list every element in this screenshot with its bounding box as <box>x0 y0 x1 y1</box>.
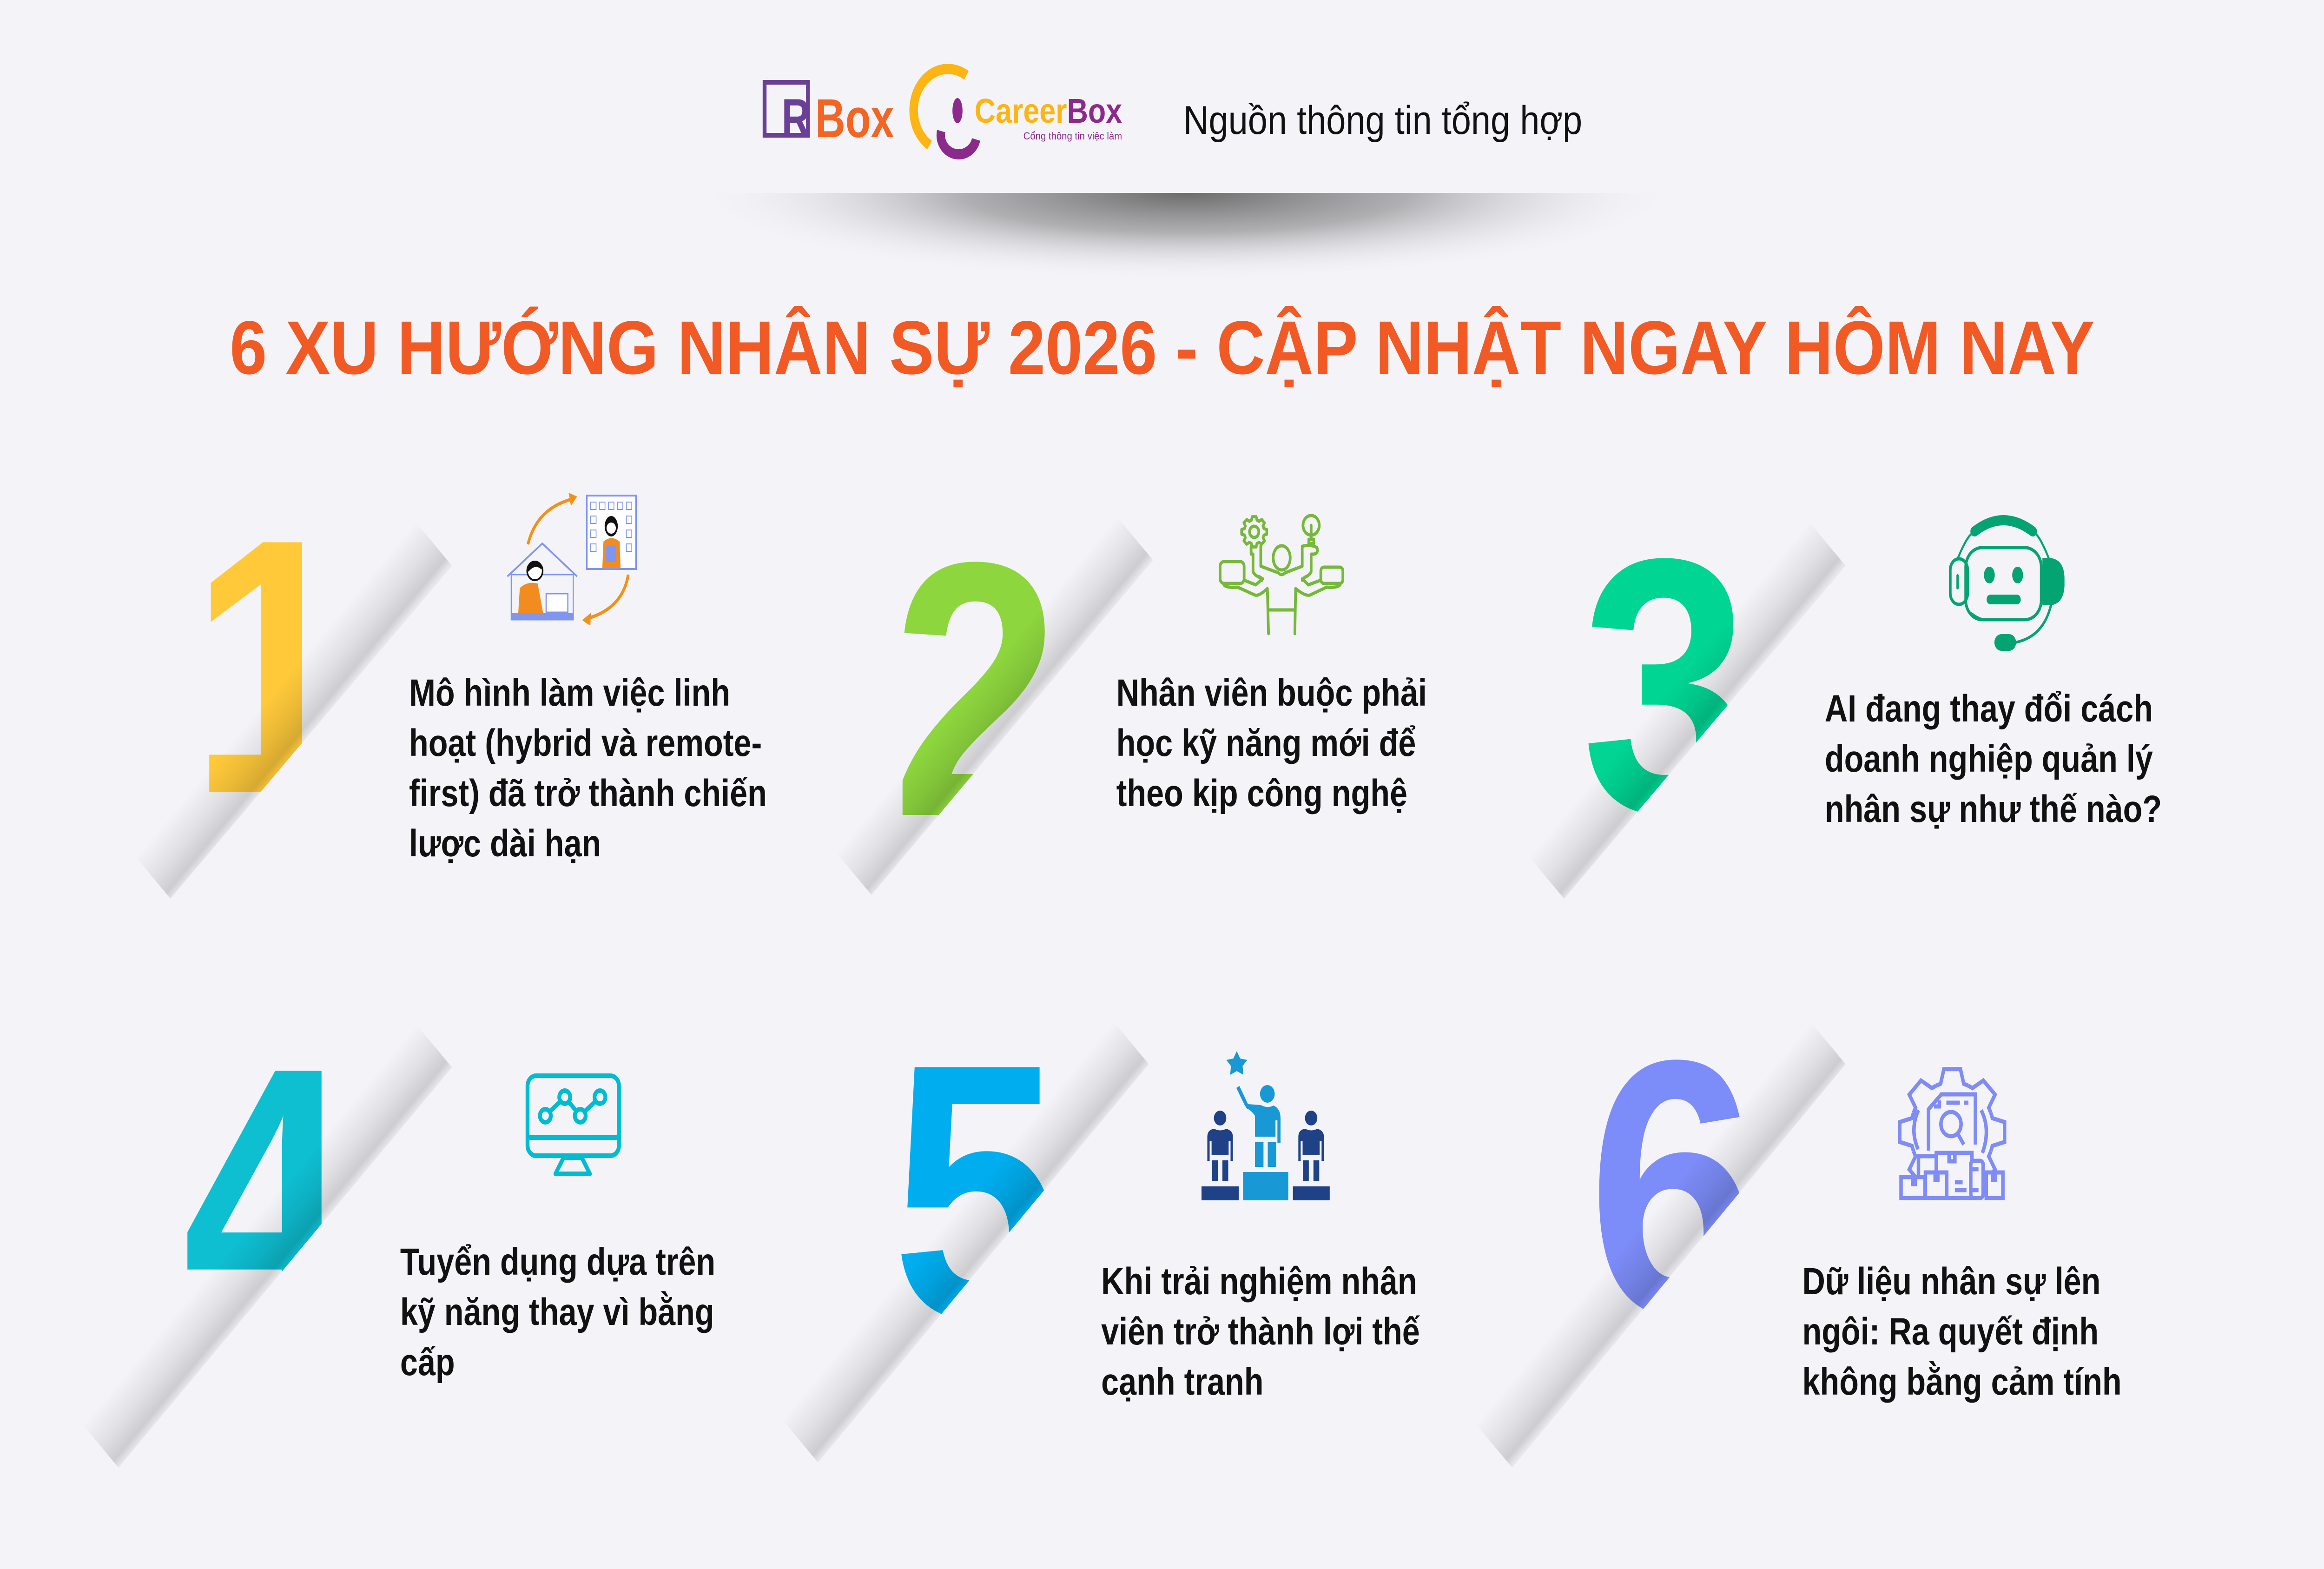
icon: AI robot headset <box>1950 520 2065 651</box>
number 3: 3 <box>1582 483 1750 888</box>
text: trend 2: Nhân viên buộc phải <box>1116 671 1427 714</box>
text: trend 1: first) đã trở thành chiến <box>409 772 767 814</box>
number 2 <box>844 526 1153 894</box>
text: trend 2: theo kịp công nghệ <box>1116 772 1407 814</box>
logo: RBox <box>765 82 894 149</box>
logo: CareerBox <box>914 69 1122 154</box>
text: trend 6: Dữ liệu nhân sự lên <box>1802 1260 2100 1302</box>
text: trend 1: lược dài hạn <box>409 822 601 864</box>
text: trend 4: Tuyển dụng dựa trên <box>400 1240 715 1283</box>
header source text: Nguồn thông tin tổng hợp <box>1183 98 1582 142</box>
number 2: 2 <box>892 487 1060 892</box>
text: trend 3: nhân sự như thế nào? <box>1825 788 2162 830</box>
number 4 <box>91 1034 452 1467</box>
number 3 <box>1538 531 1845 898</box>
text: trend 6: ngôi: Ra quyết định <box>1802 1310 2099 1352</box>
text: trend 5: viên trở thành lợi thế <box>1101 1310 1420 1352</box>
number 6: 6 <box>1588 985 1756 1390</box>
header shadow band <box>689 193 1681 281</box>
number 5: 5 <box>892 989 1060 1394</box>
text: trend 6: không bằng cảm tính <box>1802 1360 2122 1403</box>
icon: podium and winner <box>1202 1051 1330 1200</box>
logo: CareerBox: Cổng thông tin việc làm <box>1023 131 1122 142</box>
text: trend 5: Khi trải nghiệm nhân <box>1101 1260 1417 1302</box>
number 1: 1 <box>190 464 358 869</box>
logo: CareerBox: CareerBox <box>975 92 1122 130</box>
logo: RBox: Box <box>815 88 894 149</box>
icon: multi-skill person <box>1220 516 1343 634</box>
text: trend 4: kỹ năng thay vì bằng <box>400 1291 714 1333</box>
text: trend 4: cấp <box>400 1341 455 1383</box>
logo: RBox: R <box>782 88 810 149</box>
icon: data analysis gear <box>1900 1069 2005 1198</box>
number 1 <box>144 531 452 899</box>
text: trend 5: cạnh tranh <box>1101 1360 1263 1403</box>
icon: monitor with chart <box>528 1076 619 1174</box>
number 5 <box>790 1031 1149 1463</box>
title: 6 XU HƯỚNG NHÂN SỰ 2026 - CẬP NHẬT NGAY HÔM NAY <box>230 305 2095 390</box>
text: trend 3: doanh nghiệp quản lý <box>1825 737 2153 780</box>
number 4: 4 <box>183 993 353 1397</box>
text: trend 2: học kỹ năng mới để <box>1116 722 1416 764</box>
icon: hybrid work (house and office) <box>508 493 636 626</box>
text: trend 1: hoạt (hybrid và remote- <box>409 722 762 764</box>
text: trend 1: Mô hình làm việc linh <box>409 671 730 714</box>
number 6 <box>1484 1032 1845 1467</box>
text: trend 3: AI đang thay đổi cách <box>1825 687 2153 729</box>
